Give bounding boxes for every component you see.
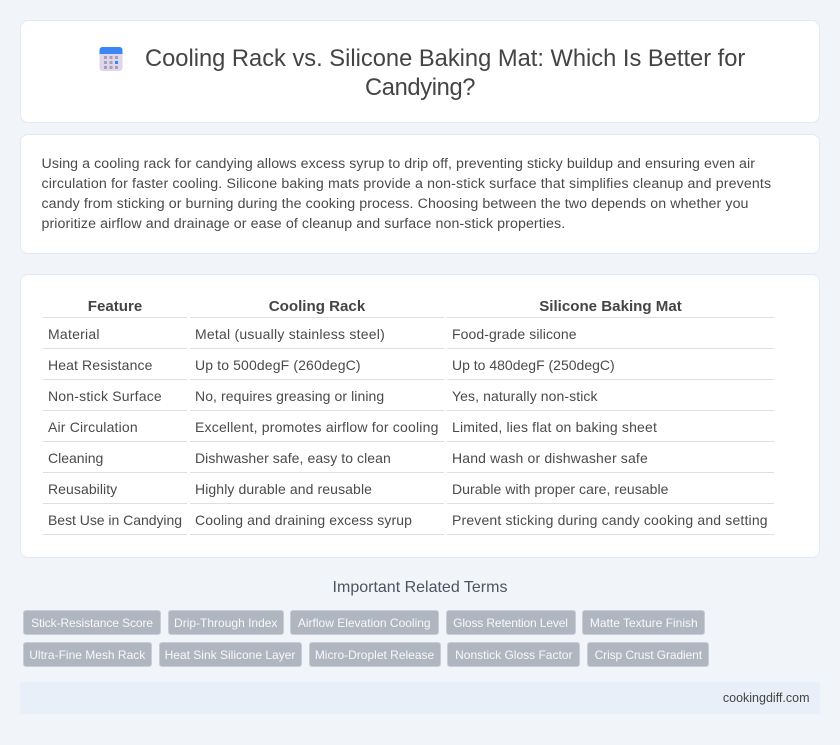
tag — [587, 642, 709, 667]
table: feature comparison: Cleaning — [48, 450, 103, 466]
tag — [446, 610, 576, 635]
panel: comparison table — [20, 274, 820, 558]
table: feature comparison: Feature — [88, 298, 142, 315]
tag: Nonstick Gloss Factor — [455, 648, 572, 662]
table: feature comparison: Hand wash or dishwasher safe — [452, 450, 648, 466]
title: Candying? — [365, 75, 475, 101]
tag — [23, 610, 161, 635]
icon: calendar — [100, 47, 122, 71]
table: feature comparison — [43, 298, 774, 535]
table: feature comparison: Prevent sticking during candy cooking and setting — [452, 512, 768, 528]
footer text: cookingdiff.com — [723, 691, 810, 705]
table: feature comparison: Cooling and draining excess syrup — [195, 512, 412, 528]
table: feature comparison: Durable with proper care, reusable — [452, 481, 668, 497]
tag — [23, 642, 152, 667]
text block: description — [42, 156, 771, 232]
tag: Stick-Resistance Score — [31, 616, 153, 630]
table: feature comparison: Excellent, promotes airflow for cooling — [195, 419, 439, 435]
tag: Heat Sink Silicone Layer — [165, 648, 295, 662]
tag: Drip-Through Index — [174, 616, 277, 630]
panel: title card — [20, 20, 820, 123]
table: feature comparison: Air Circulation — [48, 419, 138, 435]
tag: Airflow Elevation Cooling — [298, 616, 431, 630]
table: feature comparison: Silicone Baking Mat — [539, 298, 682, 315]
text block: description: candy from sticking or burning during the cooking process. Choosing between the two depends on whether you — [42, 196, 749, 212]
table: feature comparison: No, requires greasing or lining — [195, 388, 384, 404]
tag — [447, 642, 580, 667]
text block: description: circulation for faster cooling. Silicone baking mats provide a non-stick surface that simplifies cleanup and prevents — [42, 176, 771, 192]
panel: description — [20, 134, 820, 254]
heading: related terms: Important Related Terms — [333, 579, 507, 596]
table: feature comparison: Limited, lies flat on baking sheet — [452, 419, 657, 435]
table header — [88, 298, 682, 315]
footer bar — [20, 682, 820, 714]
table: feature comparison: Up to 500degF (260degC) — [195, 357, 361, 373]
table: feature comparison: Cooling Rack — [269, 298, 365, 315]
tag — [582, 610, 705, 635]
tag — [168, 610, 284, 635]
table: feature comparison: Reusability — [48, 481, 117, 497]
table: feature comparison: Highly durable and reusable — [195, 481, 372, 497]
tag — [290, 610, 438, 635]
tag: Ultra-Fine Mesh Rack — [29, 648, 145, 662]
tag — [158, 642, 302, 667]
table: feature comparison: Material — [48, 326, 100, 342]
table: feature comparison: Best Use in Candying — [48, 512, 182, 528]
text block: description: prioritize airflow and drainage or ease of cleanup and surface non-stick properties. — [42, 216, 565, 232]
table: feature comparison: Heat Resistance — [48, 357, 153, 373]
table: feature comparison: Yes, naturally non-stick — [452, 388, 598, 404]
tag: Crisp Crust Gradient — [595, 648, 702, 662]
text block: description: Using a cooling rack for candying allows excess syrup to drip off, preventing sticky buildup and ensuring even air — [42, 156, 755, 172]
tag: Matte Texture Finish — [590, 616, 698, 630]
title: Cooling Rack vs. Silicone Baking Mat: Which Is Better for — [145, 46, 745, 72]
table: feature comparison: Food-grade silicone — [452, 326, 577, 342]
table: feature comparison: Dishwasher safe, easy to clean — [195, 450, 391, 466]
tag: Micro-Droplet Release — [315, 648, 434, 662]
table: feature comparison: Up to 480degF (250degC) — [452, 357, 615, 373]
table: feature comparison: Metal (usually stainless steel) — [195, 326, 385, 342]
tag: Gloss Retention Level — [453, 616, 568, 630]
title — [145, 46, 745, 101]
tag list: related terms — [23, 610, 709, 667]
table: feature comparison: Non-stick Surface — [48, 388, 162, 404]
tag — [308, 642, 440, 667]
